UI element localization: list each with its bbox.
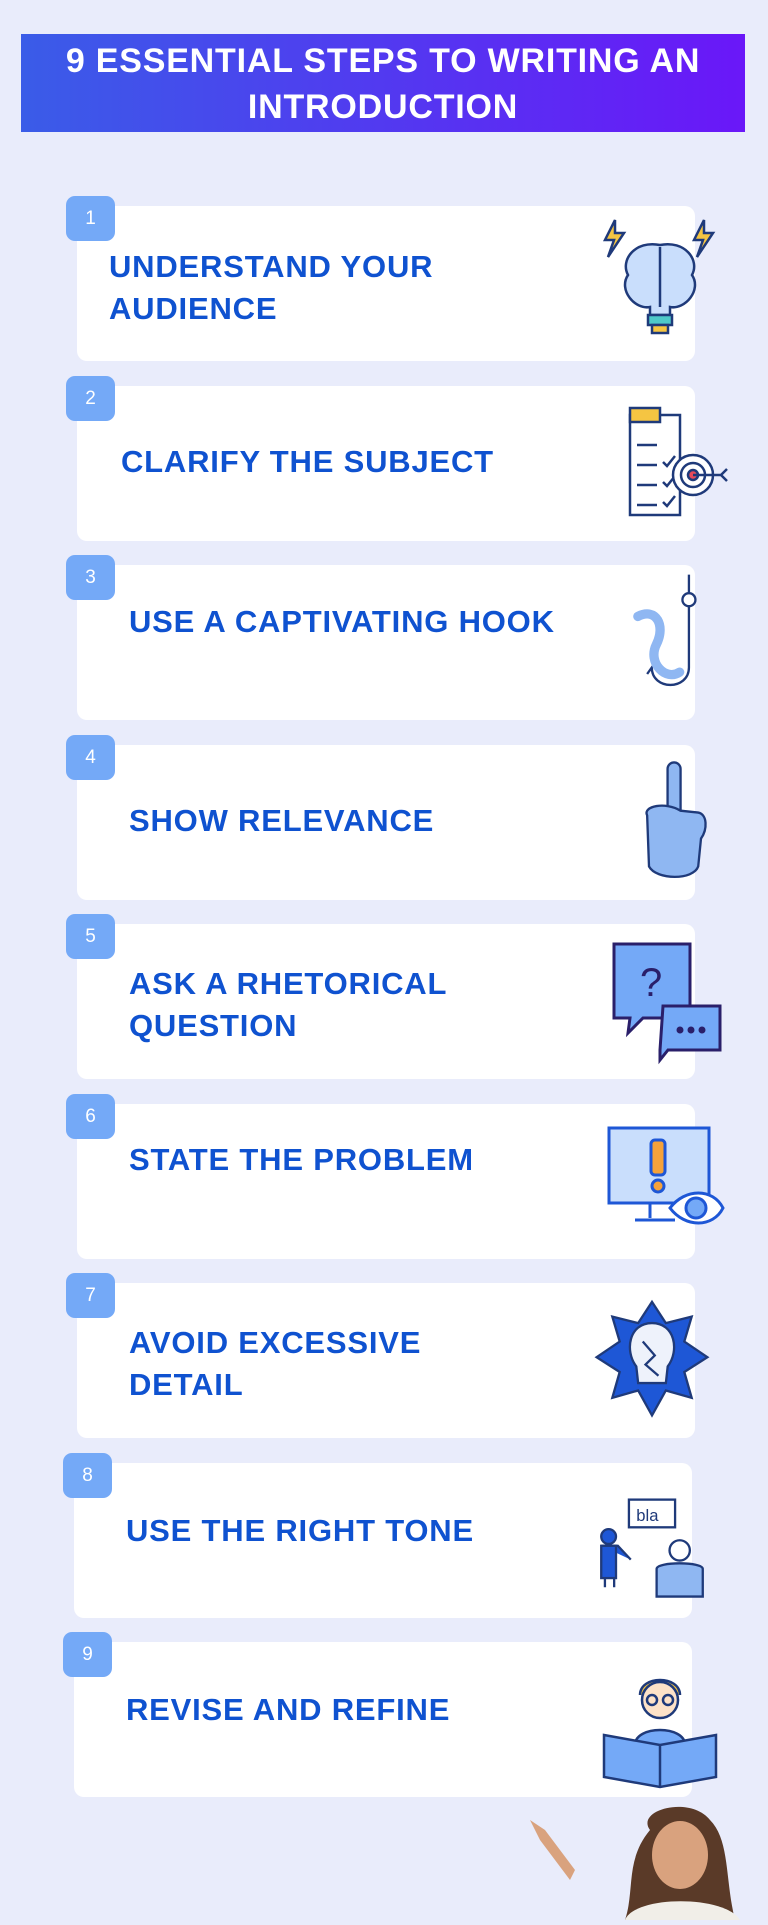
badge 2: 2: [85, 388, 96, 409]
badge 8: 8: [82, 1465, 93, 1486]
badge 4: [66, 735, 115, 780]
badge 8: [63, 1453, 112, 1498]
icon: speaker and listener: bla: [636, 1506, 659, 1525]
badge 1: 1: [85, 208, 96, 229]
badge 3: [66, 555, 115, 600]
icon: monitor warning eye: [608, 1126, 725, 1224]
badge 6: [66, 1094, 115, 1139]
text 5: QUESTION: [129, 1008, 297, 1043]
badge 9: [63, 1632, 112, 1677]
badge 2: [66, 376, 115, 421]
icon: speaker and listener: [600, 1498, 704, 1598]
badge 5: 5: [85, 926, 96, 947]
text 6: STATE THE PROBLEM: [129, 1142, 474, 1177]
card 6: [77, 1104, 695, 1259]
text 8: USE THE RIGHT TONE: [126, 1513, 474, 1548]
text 7: DETAIL: [129, 1367, 243, 1402]
person photo placeholder: [530, 1806, 740, 1920]
icon: checklist target: [628, 406, 728, 516]
title: [21, 34, 745, 132]
badge 6: 6: [85, 1106, 96, 1127]
badge 1: [66, 196, 115, 241]
text 4: SHOW RELEVANCE: [129, 803, 434, 838]
badge 7: 7: [85, 1285, 96, 1306]
text 1: UNDERSTAND YOUR: [109, 249, 433, 284]
icon: brain bulb: [603, 220, 716, 334]
card 4: [77, 745, 695, 900]
card 8: [74, 1463, 692, 1618]
icon: speech bubbles: ?: [640, 961, 662, 1005]
text 3: USE A CAPTIVATING HOOK: [129, 604, 555, 639]
badge 3: 3: [85, 567, 96, 588]
text 9: REVISE AND REFINE: [126, 1692, 450, 1727]
text 1: [109, 249, 433, 326]
badge 4: 4: [85, 747, 96, 768]
title: 9 ESSENTIAL STEPS TO WRITING AN: [66, 42, 700, 80]
badge 5: [66, 914, 115, 959]
icon: reader with book: [602, 1678, 718, 1788]
title: INTRODUCTION: [248, 88, 518, 126]
text 2: CLARIFY THE SUBJECT: [121, 444, 494, 479]
card 3: [77, 565, 695, 720]
text 5: ASK A RHETORICAL: [129, 966, 447, 1001]
card 7: [77, 1283, 695, 1438]
icon: speech bubbles: [612, 942, 722, 1064]
text 7: [129, 1325, 421, 1402]
icon: broken bulb badge: [594, 1300, 710, 1418]
card 1: [77, 206, 695, 361]
card 5: [77, 924, 695, 1079]
icon: fishing hook with worm: [633, 574, 697, 686]
text 1: AUDIENCE: [109, 291, 277, 326]
badge 7: [66, 1273, 115, 1318]
badge 9: 9: [82, 1644, 93, 1665]
text 7: AVOID EXCESSIVE: [129, 1325, 421, 1360]
card 9: [74, 1642, 692, 1797]
text 5: [129, 966, 447, 1043]
card 2: [77, 386, 695, 541]
icon: raised finger hand: [645, 761, 707, 878]
